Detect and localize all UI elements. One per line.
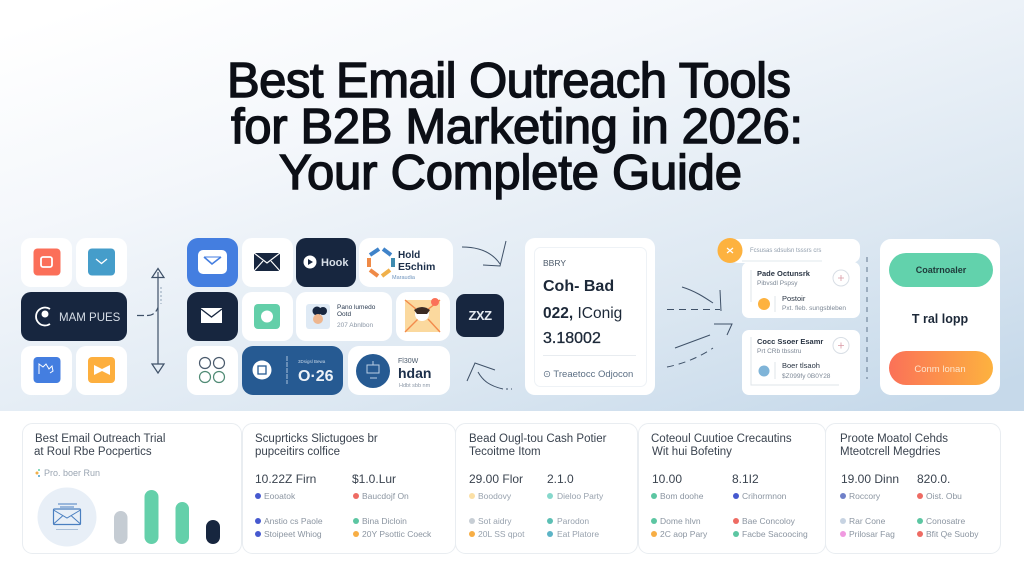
legend: 2C aop Pary [660,529,708,539]
orange button: Conm lonan [914,364,966,375]
card: first item [742,261,860,318]
title: for B2B Marketing in 2026: [231,100,803,154]
arrow: vertical double arrow [137,268,164,373]
card: second item: Cocc Ssoer Esamr [757,337,823,346]
panel: card 4 [638,424,826,554]
legend: Roccory [849,491,881,501]
card heading: Mteotcrell Megdries [840,446,941,458]
bar chart [114,490,220,544]
legend: Baucdojf On [362,491,409,501]
hexagon logo tile: E5chim [398,261,435,273]
icon: orange envelope tile [396,292,450,341]
legend: Stoipeet Whiog [264,529,322,539]
panel: middle tool tiles [187,238,504,395]
numbers [841,472,950,486]
label: BBRY [543,258,566,268]
legend: 20Y Psottic Coeck [362,529,432,539]
legend: Bfit Qe Suoby [926,529,979,539]
card: first item: Pibvsdl Pspsy [757,280,798,287]
card heading: Best Email Outreach Trial [35,433,165,445]
panel: card 3 [456,424,638,554]
legend: Conosatre [926,516,965,526]
icon: orange badge [718,238,742,263]
persona tile: Pano lumedo [337,304,376,311]
legend: Anstio cs Paole [264,516,323,526]
legend: Prilosar Fag [849,529,895,539]
icon: circles tile [187,346,238,395]
icon: dark arrows tile: ZXZ [468,308,492,323]
green button [889,253,993,287]
dark brand tile: MAM PUES [59,312,121,324]
card: second item: $Z099fy 0B0Y28 [782,373,831,380]
hexagon logo tile: Hold [398,250,420,261]
hexagon logo tile [359,238,453,287]
arrows: dashed connectors to cards [667,287,732,367]
legend: Bina Dicloin [362,516,407,526]
legend: Facbe Sacoocing [742,529,808,539]
icon: blue logo tile: Hdbt sbb nm [399,383,431,389]
icon: dark mail tile [187,292,238,341]
legend: Oist. Obu [926,491,962,501]
title: Your Complete Guide [279,146,742,200]
legend: Bom doohe [660,491,704,501]
numbers: 10.22Z Firn [255,472,316,486]
card: first item: Pade Octunsrk [757,269,811,278]
arrow: curved bottom [467,363,512,389]
trial label: T ral lopp [912,312,968,326]
icon: envelope tile [242,238,293,287]
numbers: 19.00 Dinn [841,472,899,486]
card: first item: Postoir [782,294,806,303]
icon: blue logo tile: Fl30W [398,358,419,365]
icon: orange app tile [76,346,127,395]
legend: Crihormnon [742,491,787,501]
panel: call to action [880,239,1000,395]
panel: card 2 [242,424,456,554]
card: first item: Pxt. fleb. sungsbleben [782,305,846,312]
dark brand tile [21,292,127,341]
stat line three: 3.18002 [543,330,601,347]
title [227,54,803,200]
card heading: Tecoitme Itom [469,446,541,458]
persona tile: 207 Abnlbon [337,322,374,329]
hook tile: Hook [321,257,349,269]
icon: red app tile [21,238,72,287]
hexagon logo tile: Maraudia [392,275,416,281]
card heading: Proote Moatol Cehds [840,433,948,445]
legend: Boodovy [478,491,512,501]
panel: left app tiles [21,238,127,395]
card: second item [742,330,860,395]
panel: card 5 [826,424,1000,554]
numbers: 820.0. [917,472,950,486]
panel: center stat card [525,238,655,395]
card heading: Scuprticks Slictugoes br [255,433,378,445]
green button: Coatrnoaler [916,265,967,275]
card heading: Coteoul Cuutioe Crecautins [651,433,792,445]
title: Best Email Outreach Tools [227,54,791,108]
header strip: Fcsusas sdsulsn tsssrs crs [750,248,821,254]
legend [840,491,979,539]
legend [469,491,604,539]
orange button [889,351,993,385]
card heading: Bead Ougl-tou Cash Potier [469,433,607,445]
icon: indigo app tile [21,346,72,395]
legend: Bae Concoloy [742,516,796,526]
persona tile: Ootd [337,311,351,318]
stat line one: Coh- Bad [543,278,614,295]
icon: dark arrows tile [456,294,504,337]
panel: checklist cards [718,238,860,395]
legend: Rar Cone [849,516,886,526]
card: second item: Prt CRb tbsstru [757,348,802,355]
card heading: Wit hui Bofetiny [652,446,732,458]
numbers: 29.00 Flor [469,472,523,486]
legend: Eat Platore [557,529,599,539]
legend [651,491,808,539]
metric tile: O·26 [298,368,334,385]
card: second item: Boer tlsaoh [782,361,820,370]
arrow: curved top right [462,241,506,266]
icon: blue mail tile [187,238,238,287]
legend: Parodon [557,516,589,526]
numbers: 2.1.0 [547,472,574,486]
numbers [469,472,574,486]
legend: Sot aidry [478,516,512,526]
stat line two: 022, IConig [543,305,622,322]
hook tile [296,238,356,287]
header strip [730,239,860,263]
icon: envelope circle [38,488,96,546]
numbers [255,472,396,486]
icon: blue app tile [76,238,127,287]
icon: blue logo tile: hdan [398,365,431,381]
numbers [652,472,759,486]
persona tile [296,292,392,341]
legend: Eooatok [264,491,296,501]
panel: card 1 overview [22,424,242,554]
legend: 20L SS qpot [478,529,525,539]
icon: blue logo tile [348,346,450,395]
legend: Dome hlvn [660,516,701,526]
card heading: at Roul Rbe Pocpertics [34,446,152,458]
numbers: 8.1I2 [732,472,759,486]
card heading: pupceitirs colfice [255,446,340,458]
legend: Dieloo Party [557,491,604,501]
legend [255,491,432,539]
numbers: 10.00 [652,472,682,486]
sub label: Pro. boer Run [44,468,100,478]
numbers: $1.0.Lur [352,472,396,486]
metric tile: 3Dsigsl Bewa [298,359,326,364]
icon: green tile [242,292,293,341]
metric tile [242,346,343,395]
footer text: ⊙ Treaetocc Odjocon [543,369,633,380]
